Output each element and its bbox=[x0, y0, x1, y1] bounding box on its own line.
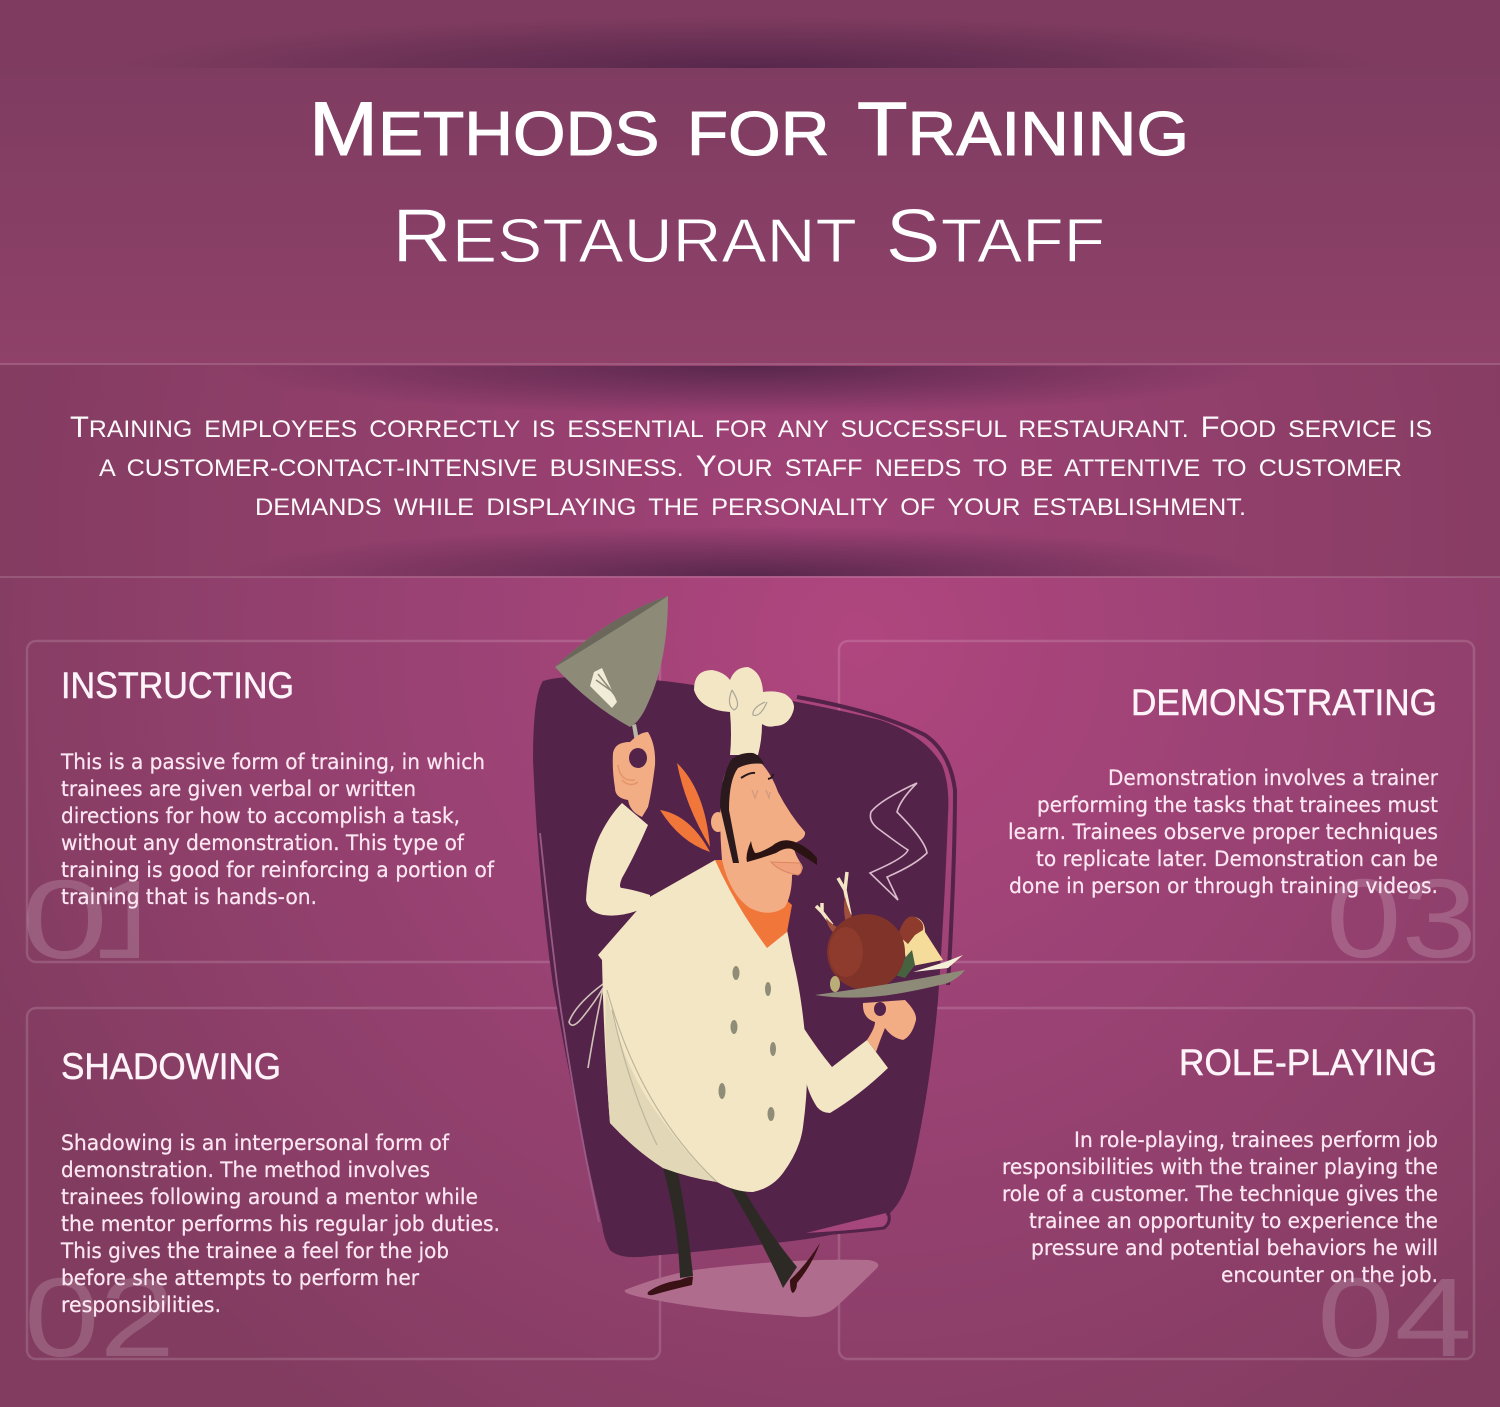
body: instructing bbox=[60, 750, 494, 910]
heading: shadowing: SHADOWING bbox=[61, 1046, 281, 1087]
legs bbox=[663, 1168, 797, 1288]
bandana tails bbox=[660, 763, 710, 852]
arm: raised bbox=[586, 803, 650, 916]
plate bbox=[815, 970, 965, 998]
title: METHODS FOR TRAINING bbox=[309, 87, 1189, 172]
number 02: 02 bbox=[24, 1255, 175, 1380]
intro text: A CUSTOMER-CONTACT-INTENSIVE BUSINESS. YOUR STAFF NEEDS TO BE ATTENTIVE TO CUSTOMER bbox=[99, 450, 1402, 483]
heading: instructing: INSTRUCTING bbox=[61, 665, 294, 706]
body: shadowing: Shadowing is an interpersonal form of bbox=[61, 1131, 449, 1156]
body: role-playing: pressure and potential behaviors he will bbox=[1031, 1236, 1438, 1261]
steam bbox=[870, 783, 927, 900]
cloche bbox=[555, 596, 668, 727]
roast body bbox=[827, 914, 905, 990]
body: shadowing: before she attempts to perform her bbox=[61, 1266, 419, 1291]
plate with roast bbox=[815, 783, 965, 998]
floor shadow bbox=[625, 1260, 878, 1317]
body: shadowing: demonstration. The method involves bbox=[61, 1158, 430, 1183]
heading: demonstrating: DEMONSTRATING bbox=[1131, 682, 1437, 723]
body: role-playing: In role-playing, trainees perform job bbox=[1074, 1128, 1438, 1153]
body: shadowing: responsibilities. bbox=[61, 1293, 221, 1318]
body: demonstrating: Demonstration involves a trainer bbox=[1108, 766, 1438, 791]
body: instructing: training is good for reinforcing a portion of bbox=[61, 858, 494, 883]
body: shadowing: This gives the trainee a feel for the job bbox=[60, 1239, 449, 1264]
body: demonstrating: to replicate later. Demonstration can be bbox=[1036, 847, 1438, 872]
body: shadowing bbox=[60, 1131, 500, 1318]
apron bbox=[606, 990, 717, 1182]
body: demonstrating bbox=[1008, 766, 1438, 899]
hair and sideburn bbox=[720, 753, 764, 863]
intro text bbox=[70, 411, 1432, 521]
collar bbox=[715, 860, 792, 948]
body: role-playing: role of a customer. The technique gives the bbox=[1002, 1182, 1438, 1207]
intro text: TRAINING EMPLOYEES CORRECTLY IS ESSENTIAL FOR ANY SUCCESSFUL RESTAURANT. FOOD SERVICE IS bbox=[70, 411, 1432, 444]
shoes bbox=[648, 1243, 820, 1295]
body: role-playing: encounter on the job. bbox=[1221, 1263, 1438, 1288]
hand: plate side bbox=[863, 1000, 916, 1052]
title bbox=[309, 87, 1189, 279]
panel: shadowing bbox=[24, 1008, 660, 1380]
title: RESTAURANT STAFF bbox=[392, 194, 1105, 279]
panel: instructing bbox=[21, 641, 660, 982]
body: role-playing: trainee an opportunity to experience the bbox=[1029, 1209, 1438, 1234]
eyes and nose details bbox=[741, 773, 773, 798]
body: demonstrating: performing the tasks that trainees must bbox=[1037, 793, 1438, 818]
body: demonstrating: done in person or through training videos. bbox=[1009, 874, 1438, 899]
body: role-playing bbox=[1002, 1128, 1438, 1288]
head bbox=[720, 759, 805, 913]
hat bbox=[694, 667, 794, 755]
apron strings bbox=[569, 984, 603, 1068]
body: demonstrating: learn. Trainees observe proper techniques bbox=[1008, 820, 1438, 845]
body: instructing: training that is hands-on. bbox=[61, 885, 317, 910]
body: instructing: directions for how to accomplish a task, bbox=[61, 804, 460, 829]
coat buttons bbox=[718, 966, 776, 1121]
body: shadowing: the mentor performs his regular job duties. bbox=[61, 1212, 500, 1237]
number 01: 01 bbox=[21, 857, 175, 982]
garnish bbox=[903, 917, 943, 967]
moustache bbox=[746, 840, 817, 865]
heading: role-playing: ROLE-PLAYING bbox=[1179, 1042, 1437, 1083]
drumstick bones bbox=[816, 872, 850, 925]
ear bbox=[711, 812, 725, 832]
illustration: chef bbox=[533, 596, 965, 1317]
intro text: DEMANDS WHILE DISPLAYING THE PERSONALITY OF YOUR ESTABLISHMENT. bbox=[255, 494, 1246, 521]
number 04: 04 bbox=[1317, 1255, 1472, 1380]
hand: raised with cloche stem bbox=[613, 724, 655, 817]
body: instructing: without any demonstration. This type of bbox=[61, 831, 464, 856]
body: role-playing: responsibilities with the trainer playing the bbox=[1002, 1155, 1438, 1180]
panel: role-playing bbox=[839, 1008, 1474, 1380]
body: shadowing: trainees following around a mentor while bbox=[61, 1185, 478, 1210]
body: instructing: trainees are given verbal or written bbox=[61, 777, 416, 802]
arm: plate side bbox=[803, 1027, 888, 1113]
body coat bbox=[598, 860, 807, 1192]
number 03: 03 bbox=[1326, 856, 1477, 981]
panel: demonstrating bbox=[839, 641, 1477, 981]
body: instructing: This is a passive form of training, in which bbox=[60, 750, 485, 775]
backdrop blob bbox=[533, 677, 955, 1257]
mouth bbox=[771, 862, 802, 875]
